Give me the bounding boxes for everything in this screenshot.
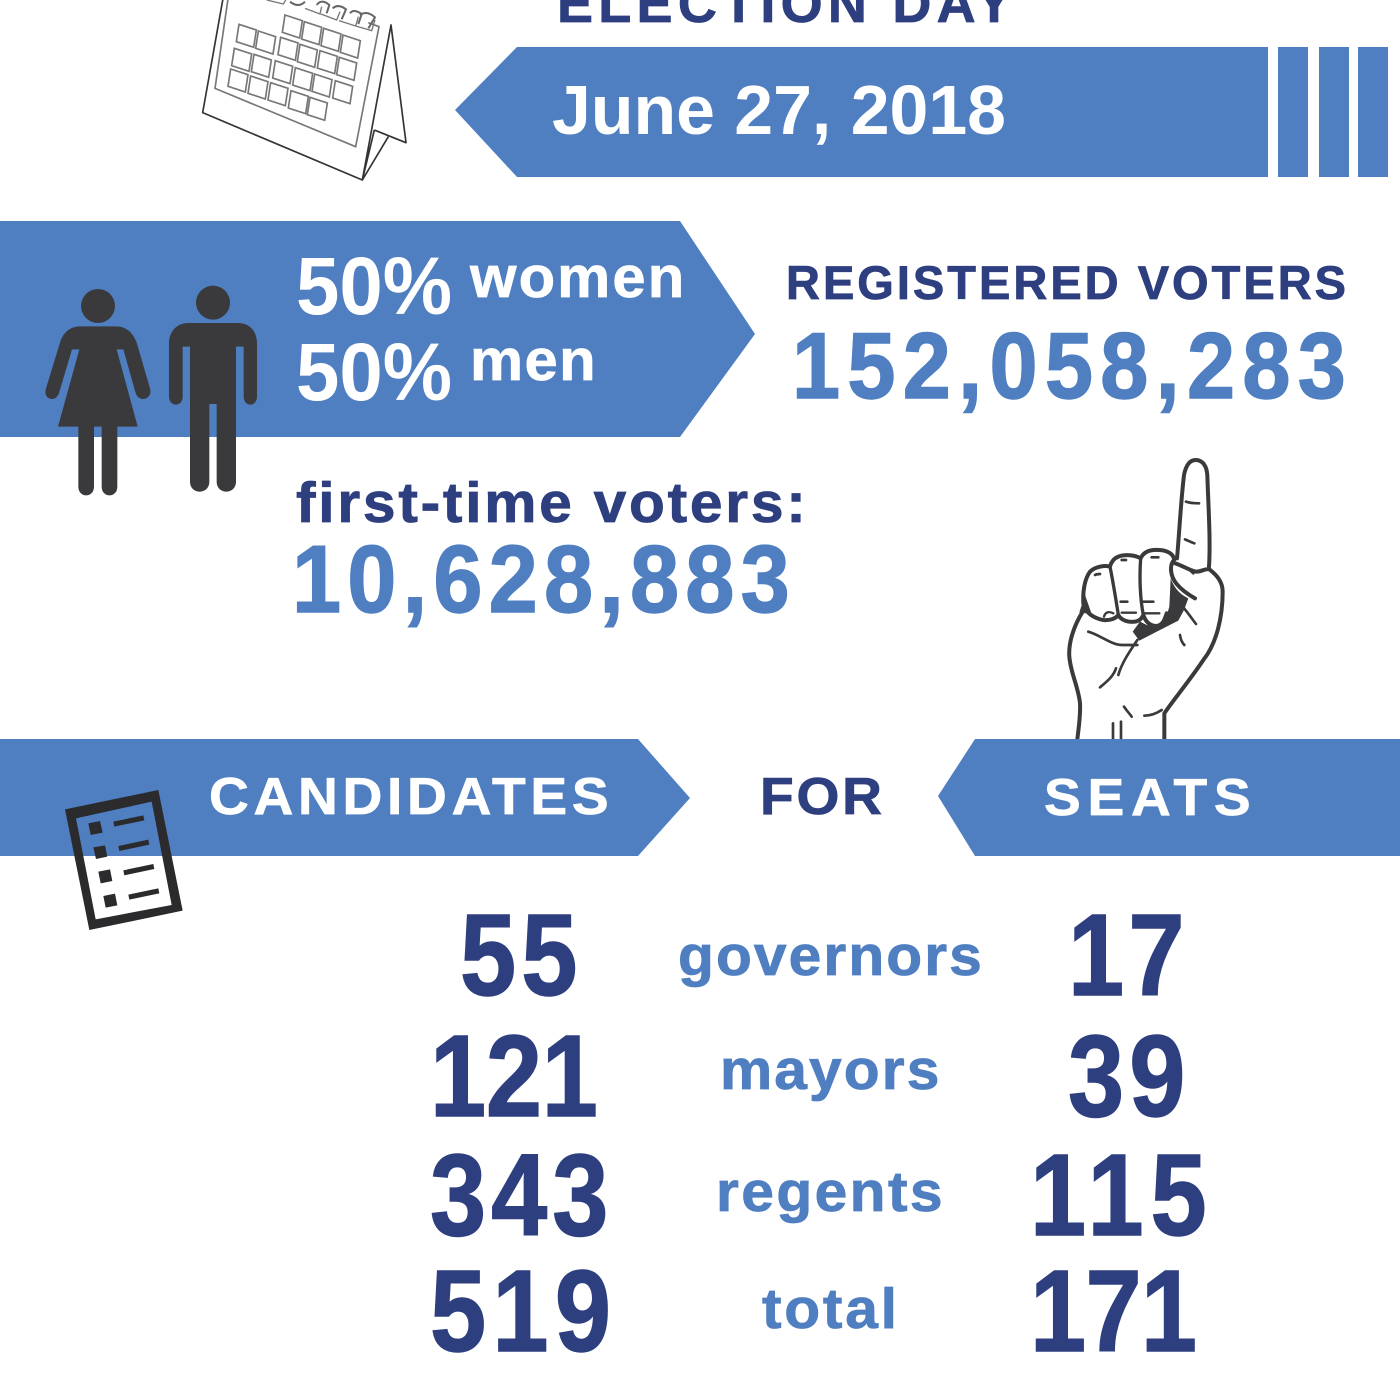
banner: candidates: CANDIDATES	[209, 767, 609, 826]
registered voters	[786, 256, 1346, 419]
row: mayors: 121	[430, 1013, 598, 1142]
row: regents: regents	[716, 1161, 943, 1224]
banner: gender split: men	[470, 329, 596, 393]
icon: woman and man	[45, 286, 257, 495]
label: for: FOR	[760, 767, 882, 826]
banner: seats: SEATS	[1044, 768, 1251, 827]
row: total: 519	[430, 1248, 611, 1377]
row: regents: 343	[430, 1132, 608, 1261]
banner: election date: June 27, 2018	[552, 71, 1006, 149]
row: regents	[430, 1132, 1207, 1261]
banner: gender split: 50%	[296, 327, 452, 418]
registered voters: 152,058,283	[792, 314, 1346, 419]
banner: candidates	[0, 739, 690, 856]
banner: gender split: women	[469, 246, 684, 310]
row: governors: 55	[460, 892, 577, 1021]
row: total	[430, 1248, 1197, 1377]
row: total: 171	[1030, 1248, 1197, 1377]
row: mayors: mayors	[720, 1039, 939, 1102]
banner: gender split: 50%	[296, 241, 452, 332]
icon: raised index finger hand	[1069, 460, 1223, 739]
banner: gender split	[0, 221, 755, 437]
row: total: total	[762, 1278, 897, 1341]
icon: ballot checklist	[65, 790, 183, 930]
first-time voters: first-time voters:	[296, 472, 806, 535]
row: governors	[460, 892, 1185, 1021]
row: mayors: 39	[1068, 1013, 1185, 1142]
row: mayors	[430, 1013, 1185, 1142]
banner: election date	[455, 47, 1388, 177]
first-time voters	[292, 472, 806, 633]
row: governors: governors	[678, 925, 982, 988]
icon: desk calendar	[203, 0, 406, 180]
row: regents: 115	[1030, 1132, 1207, 1261]
row: governors: 17	[1068, 892, 1185, 1021]
banner: seats	[938, 739, 1400, 856]
first-time voters: 10,628,883	[292, 526, 790, 633]
registered voters: REGISTERED VOTERS	[786, 256, 1346, 309]
table: candidates and seats by office	[430, 892, 1207, 1377]
